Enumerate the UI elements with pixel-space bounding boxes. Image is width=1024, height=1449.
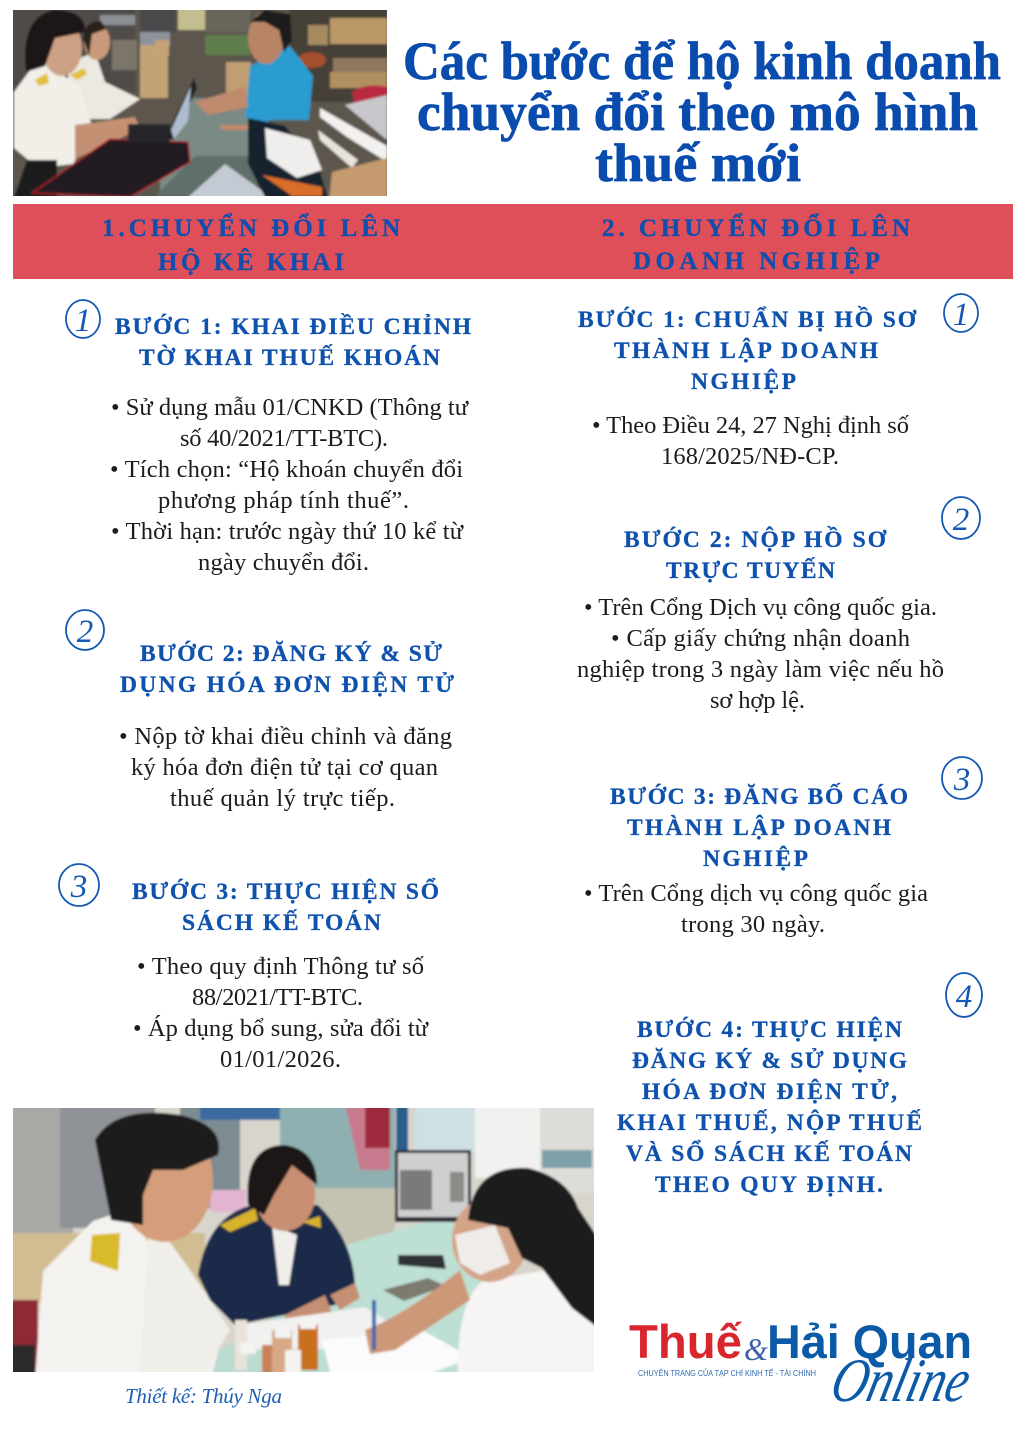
heading: step 1: BƯỚC 1: KHAI ĐIỀU CHỈNH (115, 313, 471, 340)
band heading: column 1: 1.CHUYỂN ĐỔI LÊN (102, 213, 400, 242)
title: Các bước để hộ kinh doanh (403, 31, 1001, 91)
text: step 3 details: • Theo quy định Thông tư số (137, 953, 424, 980)
heading: step 1: NGHIỆP (691, 369, 796, 395)
text: step 2 details: • Trên Cổng Dịch vụ công quốc gia. (584, 594, 937, 621)
title: thuế mới (595, 133, 801, 193)
band heading: column 1 (102, 213, 400, 276)
text: step 1 details: • Sử dụng mẫu 01/CNKD (Thông tư (111, 394, 469, 421)
heading: step 3 (132, 878, 439, 936)
heading: step 3: BƯỚC 3: THỰC HIỆN SỔ (132, 878, 439, 905)
heading: step 2: TRỰC TUYẾN (666, 557, 835, 584)
text: step 1 details: 168/2025/NĐ-CP. (661, 443, 839, 470)
heading: step 1: TỜ KHAI THUẾ KHOÁN (139, 344, 440, 371)
heading: step 1 (115, 313, 471, 371)
logo: Thuế & Hải Quan Online (629, 1315, 978, 1415)
logo: Thuế & Hải Quan Online: CHUYÊN TRANG CỦA TẠP CHÍ KINH TẾ - TÀI CHÍNH (638, 1367, 816, 1378)
text: step 2 details (577, 594, 944, 714)
text: step 3 details: • Áp dụng bổ sung, sửa đổi từ (133, 1014, 429, 1042)
heading: step 4: THEO QUY ĐỊNH. (655, 1172, 883, 1198)
heading: step 2: DỤNG HÓA ĐƠN ĐIỆN TỬ (120, 671, 454, 698)
title: chuyển đổi theo mô hình (417, 82, 978, 142)
icon: number 4: 4 (956, 979, 972, 1015)
icon: number 2 (66, 610, 104, 650)
logo: Thuế & Hải Quan Online: Online (825, 1346, 978, 1415)
icon: number 4 (946, 973, 982, 1017)
text: step 2 details (119, 723, 452, 812)
icon: number 2: 2 (77, 614, 93, 650)
text: step 2 details: sơ hợp lệ. (710, 687, 805, 714)
heading: step 3: NGHIỆP (703, 846, 808, 872)
band heading: column 2: DOANH NGHIỆP (633, 247, 880, 275)
photo: tax officers in a shop (13, 10, 387, 196)
heading: step 4: HÓA ĐƠN ĐIỆN TỬ, (642, 1078, 897, 1105)
heading: step 2 (624, 526, 887, 584)
text: step 3 details (584, 880, 928, 938)
logo: Thuế & Hải Quan Online: Thuế (629, 1315, 743, 1368)
heading: step 1: BƯỚC 1: CHUẨN BỊ HỒ SƠ (578, 306, 917, 333)
icon: number 3 (942, 757, 982, 799)
text: step 1 details: • Thời hạn: trước ngày thứ 10 kể từ (111, 518, 464, 545)
icon: number 1: 1 (953, 297, 969, 333)
icon: number 1 (944, 294, 978, 333)
text: step 1 details: ngày chuyển đổi. (198, 549, 369, 576)
text: step 1 details (110, 394, 469, 576)
text: step 1 details: • Theo Điều 24, 27 Nghị định số (592, 412, 909, 439)
heading: step 2: BƯỚC 2: ĐĂNG KÝ & SỬ (140, 640, 442, 667)
band heading: column 1: HỘ KÊ KHAI (158, 248, 344, 276)
band heading: column 2: 2. CHUYỂN ĐỔI LÊN (602, 213, 910, 242)
text: step 1 details (592, 412, 909, 470)
text: step 2 details: thuế quản lý trực tiếp. (170, 785, 395, 812)
text: step 2 details: • Nộp tờ khai điều chỉnh và đăng (119, 723, 452, 750)
text: step 1 details: • Tích chọn: “Hộ khoán chuyển đổi (110, 456, 463, 483)
logo: Thuế & Hải Quan Online: Hải Quan (767, 1315, 972, 1368)
text: step 3 details: • Trên Cổng dịch vụ công quốc gia (584, 880, 928, 907)
designer credit: Thiết kế: Thúy Nga (125, 1384, 282, 1408)
logo: Thuế & Hải Quan Online: & (744, 1331, 768, 1367)
text: step 1 details: số 40/2021/TT-BTC). (180, 425, 388, 452)
icon: number 3: 3 (953, 762, 970, 798)
text: step 3 details (133, 953, 429, 1073)
title (403, 31, 1001, 193)
heading: step 4: VÀ SỔ SÁCH KẾ TOÁN (626, 1140, 912, 1167)
panel: enterprise conversion steps (577, 294, 982, 1198)
text: step 1 details: phương pháp tính thuế”. (158, 487, 409, 514)
icon: number 3 (59, 864, 99, 906)
text: step 3 details: 88/2021/TT-BTC. (192, 984, 363, 1011)
band heading: column 2 (602, 213, 910, 275)
text: step 3 details: trong 30 ngày. (681, 911, 825, 938)
heading: step 4: KHAI THUẾ, NỘP THUẾ (617, 1109, 922, 1136)
heading: step 3: BƯỚC 3: ĐĂNG BỐ CÁO (610, 783, 908, 810)
heading: step 1 (578, 306, 917, 395)
icon: number 1 (66, 300, 100, 339)
icon: number 2: 2 (953, 502, 969, 538)
heading: step 4 (617, 1016, 922, 1198)
heading: step 3: SÁCH KẾ TOÁN (182, 909, 381, 936)
heading: step 2 (120, 640, 454, 698)
text: step 2 details: nghiệp trong 3 ngày làm việc nếu hồ (577, 656, 944, 683)
icon: number 3: 3 (70, 869, 87, 905)
text: step 2 details: • Cấp giấy chứng nhận doanh (611, 625, 910, 652)
heading: step 2: BƯỚC 2: NỘP HỒ SƠ (624, 526, 887, 553)
icon: number 1: 1 (75, 303, 91, 339)
icon: number 2 (942, 497, 980, 539)
heading: step 1: THÀNH LẬP DOANH (614, 338, 878, 364)
heading: step 4: ĐĂNG KÝ & SỬ DỤNG (632, 1047, 907, 1074)
heading: step 3: THÀNH LẬP DOANH (627, 815, 891, 841)
text: step 2 details: ký hóa đơn điện tử tại cơ quan (131, 754, 438, 781)
red header band (13, 204, 1013, 279)
heading: step 4: BƯỚC 4: THỰC HIỆN (637, 1016, 902, 1043)
heading: step 3 (610, 783, 908, 872)
photo: officers advising a pharmacy owner (5, 1100, 600, 1380)
text: step 3 details: 01/01/2026. (220, 1046, 341, 1073)
panel: household declaration steps (59, 300, 471, 1073)
